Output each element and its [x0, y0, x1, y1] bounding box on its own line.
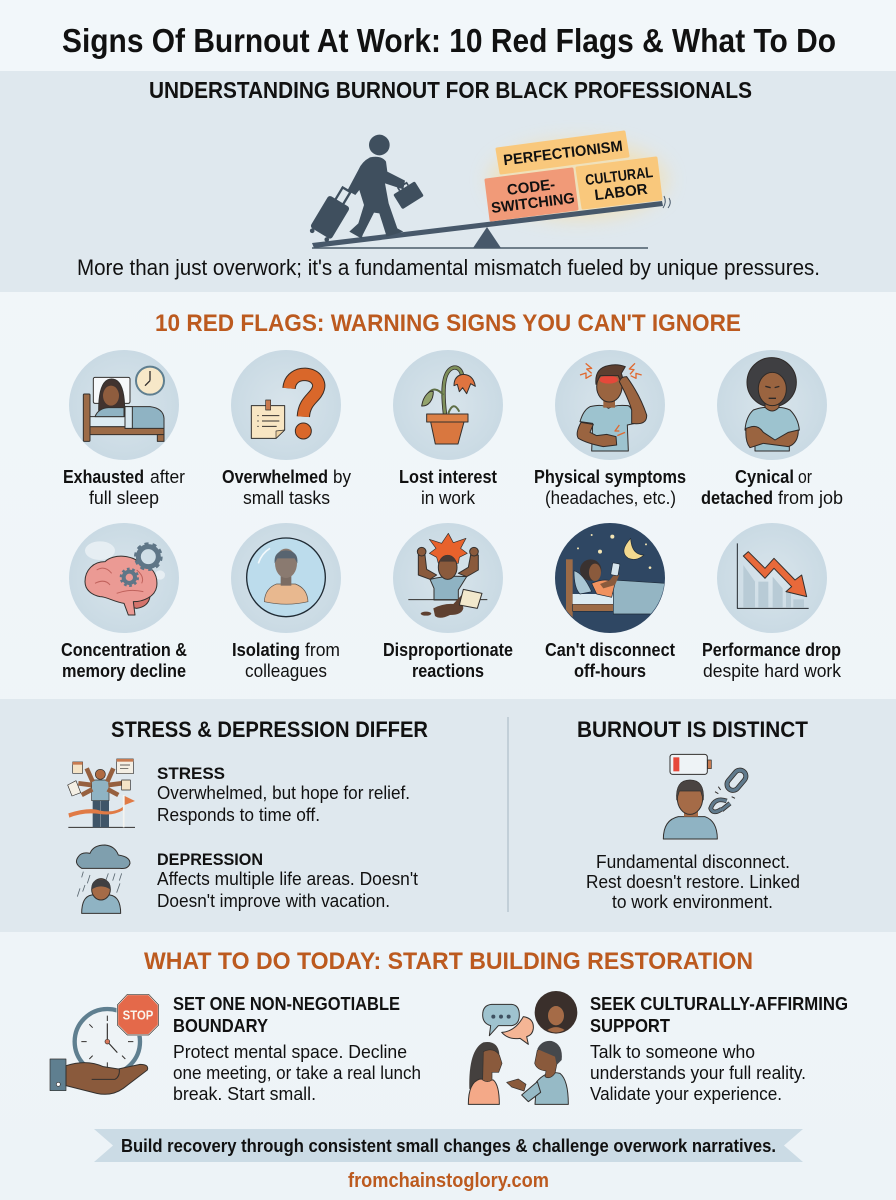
illustration: person carrying weights on a seesaw: [308, 132, 670, 248]
banner: Build recovery through consistent small changes & challenge overwork narratives.: [121, 1136, 776, 1156]
label: full sleep: [89, 488, 159, 508]
label: Performance drop: [702, 640, 841, 660]
label: [232, 640, 340, 681]
label: [534, 467, 686, 508]
flag 5: cynical: [701, 350, 843, 508]
label: off-hours: [574, 661, 646, 681]
label: [61, 640, 187, 681]
label: by: [333, 467, 351, 487]
text block: stress: [157, 764, 410, 825]
flag 6: concentration: [61, 523, 187, 681]
text block: boundary: break. Start small.: [173, 1084, 316, 1104]
icon: wilted plant: [393, 350, 503, 460]
text block: support: Talk to someone who: [590, 1042, 755, 1062]
action: seek support: [468, 991, 848, 1104]
text block: stress: Responds to time off.: [157, 805, 320, 825]
title: Signs Of Burnout At Work: 10 Red Flags & What To Do: [62, 22, 836, 59]
text block: boundary: [173, 994, 421, 1104]
icon: hand holding clock with stop sign: [50, 994, 159, 1094]
icon: falling chart arrow: [717, 523, 827, 633]
heading: burnout is distinct: BURNOUT IS DISTINCT: [577, 717, 809, 742]
icon: person in bubble: [231, 523, 341, 633]
flag 7: isolating: [231, 523, 341, 681]
label: memory decline: [62, 661, 186, 681]
label: small tasks: [243, 488, 330, 508]
flag 10: performance drop: [702, 523, 842, 681]
text block: boundary: Protect mental space. Decline: [173, 1042, 407, 1062]
block label: cultural labor: LABOR: [594, 181, 649, 204]
text block: burnout: Fundamental disconnect.: [596, 852, 790, 872]
label: Isolating: [232, 640, 300, 660]
icon: person with headache: [555, 350, 665, 460]
label: Exhausted: [63, 467, 144, 487]
panel: stress, depression and burnout comparison: [0, 699, 896, 932]
label: (headaches, etc.): [545, 488, 676, 508]
label: reactions: [412, 661, 484, 681]
label: detached: [701, 488, 773, 508]
icon: person with arms crossed: [717, 350, 827, 460]
heading: understanding burnout: UNDERSTANDING BURNOUT FOR BLACK PROFESSIONALS: [149, 77, 752, 103]
text block: support: understands your full reality.: [590, 1063, 806, 1083]
heading: 10 red flags: 10 RED FLAGS: WARNING SIGNS YOU CAN'T IGNORE: [155, 310, 741, 337]
text block: depression: DEPRESSION: [157, 850, 263, 869]
flag 4: physical symptoms: [534, 350, 686, 508]
label: Disproportionate: [383, 640, 513, 660]
block label: cultural labor: [584, 164, 656, 205]
panel: understanding burnout: [0, 71, 896, 292]
label: [702, 640, 842, 681]
action: set one boundary: [50, 994, 421, 1104]
label: Lost interest: [399, 467, 497, 487]
icon: person under rain cloud: [76, 845, 130, 913]
text block: burnout: [586, 852, 800, 912]
label: [545, 640, 675, 681]
icon: person on phone in bed at night: [555, 523, 665, 633]
label: [383, 640, 513, 681]
label: Concentration &: [61, 640, 187, 660]
label: Cynical: [735, 467, 794, 487]
icon: people in conversation: [468, 991, 577, 1104]
website url: fromchainstoglory.com: [348, 1170, 549, 1192]
icon: note and question mark: [231, 350, 341, 460]
flag 9: can't disconnect: [545, 523, 675, 681]
block label: perfectionism: PERFECTIONISM: [502, 138, 624, 169]
text block: stress: STRESS: [157, 764, 225, 783]
label: [63, 467, 185, 508]
text block: burnout: Rest doesn't restore. Linked: [586, 872, 800, 892]
text block: support: [590, 994, 848, 1104]
flag 1: exhausted: [63, 350, 185, 508]
block label: code-switching: SWITCHING: [490, 190, 576, 217]
label: or: [798, 467, 812, 487]
heading: stress and depression differ: STRESS & DEPRESSION DIFFER: [111, 717, 428, 742]
text block: support: SUPPORT: [590, 1016, 670, 1036]
label: Overwhelmed: [222, 467, 328, 487]
text block: boundary: BOUNDARY: [173, 1016, 268, 1036]
label: [701, 467, 843, 508]
block label: code-switching: CODE-: [506, 176, 556, 199]
text block: depression: [157, 850, 418, 911]
icon: brain with gears: [69, 523, 179, 633]
label: Physical symptoms: [534, 467, 686, 487]
label: Can't disconnect: [545, 640, 675, 660]
stop sign text: STOP: [123, 1009, 154, 1023]
flag 2: overwhelmed: [222, 350, 351, 508]
label: after: [150, 467, 185, 487]
banner: [94, 1129, 803, 1162]
label: [399, 467, 497, 508]
text block: stress: Overwhelmed, but hope for relief.: [157, 783, 410, 803]
text block: support: Validate your experience.: [590, 1084, 782, 1104]
text block: depression: Doesn't improve with vacation.: [157, 891, 390, 911]
icon: drained battery, person and broken chain: [663, 754, 748, 839]
tagline: More than just overwork; it's a fundamental mismatch fueled by unique pressures.: [77, 255, 820, 280]
label: from: [305, 640, 340, 660]
label: [222, 467, 351, 508]
label: from job: [778, 488, 843, 508]
label: in work: [421, 488, 476, 508]
label: despite hard work: [703, 661, 842, 681]
block label: code-switching: [488, 174, 576, 217]
icon: angry person with spilled mug: [393, 523, 503, 633]
text block: depression: Affects multiple life areas. Doesn't: [157, 869, 418, 889]
text block: boundary: SET ONE NON-NEGOTIABLE: [173, 994, 400, 1014]
heading: what to do today: WHAT TO DO TODAY: START BUILDING RESTORATION: [144, 948, 753, 975]
label: colleagues: [245, 661, 327, 681]
icon: stressed multitasker: [68, 759, 135, 827]
flag 8: disproportionate reactions: [383, 523, 513, 681]
icon: person in bed with clock: [69, 350, 179, 460]
flag 3: lost interest: [393, 350, 503, 508]
block label: cultural labor: CULTURAL: [584, 164, 654, 189]
text block: burnout: to work environment.: [612, 892, 773, 912]
text block: boundary: one meeting, or take a real lunch: [173, 1063, 421, 1083]
text block: support: SEEK CULTURALLY-AFFIRMING: [590, 994, 848, 1014]
